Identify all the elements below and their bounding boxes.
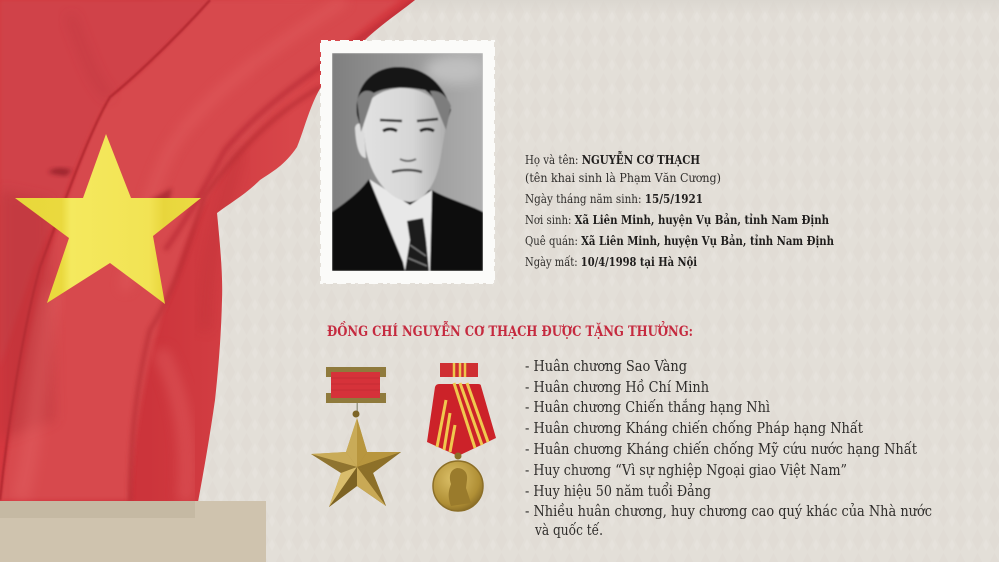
flag star bbox=[15, 134, 201, 304]
award 6: - Huy chương “Vì sự nghiệp Ngoại giao Việt Nam” bbox=[525, 463, 847, 479]
icon: resistance medal with ribbon bbox=[427, 363, 496, 511]
award 3: - Huân chương Chiến thắng hạng Nhì bbox=[525, 398, 770, 416]
hometown: Quê quán: Xã Liên Minh, huyện Vụ Bản, tỉnh Nam Định bbox=[525, 233, 834, 248]
awards heading: ĐỒNG CHÍ NGUYỄN CƠ THẠCH ĐƯỢC TẶNG THƯỞNG: bbox=[327, 322, 693, 340]
biography text block bbox=[525, 150, 834, 269]
award 4: - Huân chương Kháng chiến chống Pháp hạng Nhất bbox=[525, 420, 863, 437]
icon: gold star medal bbox=[311, 367, 401, 507]
full name: Họ và tên: NGUYỄN CƠ THẠCH bbox=[525, 150, 700, 167]
date of death: Ngày mất: 10/4/1998 tại Hà Nội bbox=[525, 254, 697, 269]
portrait photo frame bbox=[321, 41, 494, 283]
portrait bbox=[332, 53, 485, 271]
date of birth: Ngày tháng năm sinh: 15/5/1921 bbox=[525, 192, 703, 206]
beige base block bbox=[0, 501, 266, 562]
awards list bbox=[525, 358, 932, 539]
flag with folds bbox=[0, 0, 420, 510]
birth name: (tên khai sinh là Phạm Văn Cương) bbox=[525, 171, 721, 185]
award 1: - Huân chương Sao Vàng bbox=[525, 358, 687, 375]
award 8: - Nhiều huân chương, huy chương cao quý khác của Nhà nước bbox=[525, 503, 932, 520]
award 2: - Huân chương Hồ Chí Minh bbox=[525, 379, 709, 396]
award 7: - Huy hiệu 50 năm tuổi Đảng bbox=[525, 482, 711, 500]
award 8 continuation: và quốc tế. bbox=[534, 522, 603, 539]
place of birth: Nơi sinh: Xã Liên Minh, huyện Vụ Bản, tỉnh Nam Định bbox=[525, 212, 829, 227]
award 5: - Huân chương Kháng chiến chống Mỹ cứu nước hạng Nhất bbox=[525, 441, 917, 458]
